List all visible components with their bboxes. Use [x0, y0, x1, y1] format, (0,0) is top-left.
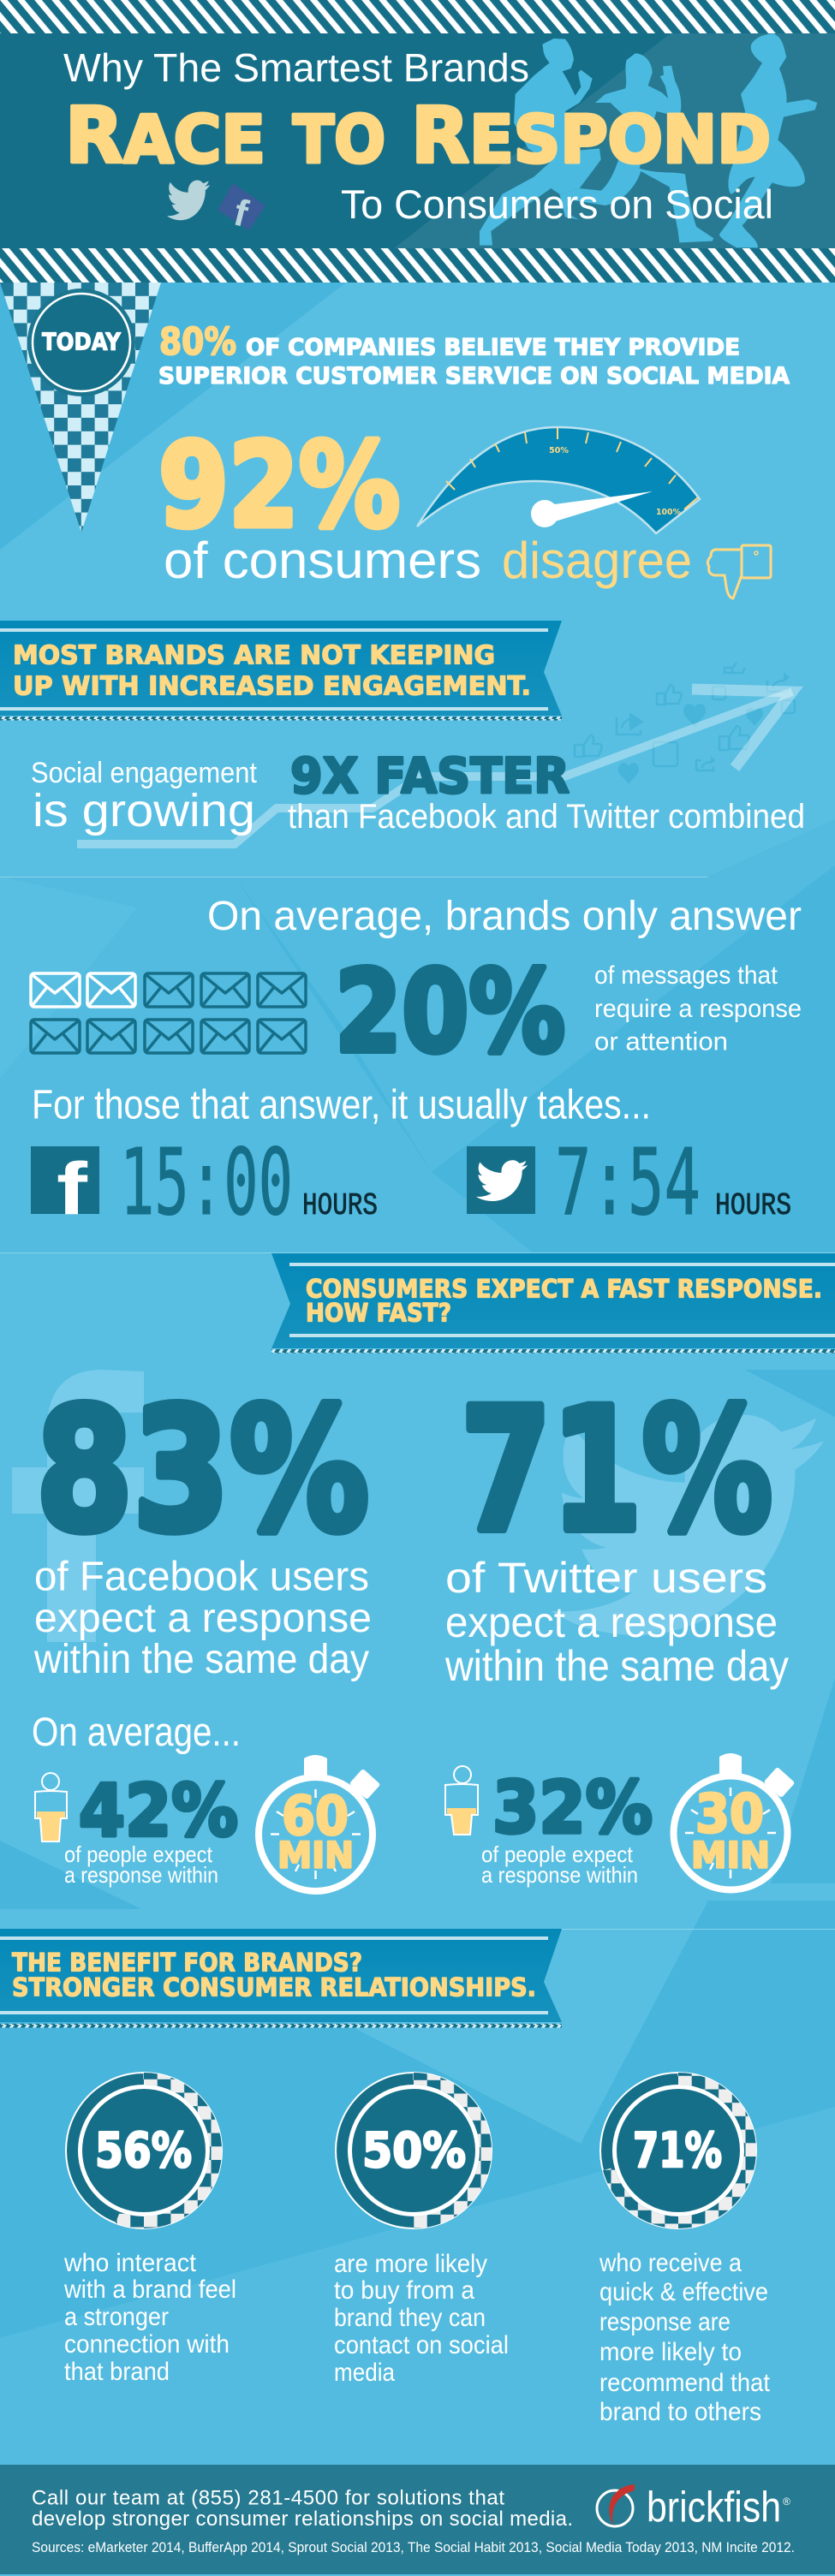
stat: facebook 83%: expect a response: [34, 1596, 372, 1641]
banner: consumers expect: HOW FAST?: [306, 1298, 451, 1327]
text: are more likely: [334, 2250, 509, 2387]
brickfish logo: ®: [783, 2496, 790, 2508]
stat: 42%: [64, 1769, 238, 1888]
text: are more likely: brand they can: [334, 2304, 486, 2332]
icon: person 42%: [35, 1773, 67, 1841]
icon: ten envelopes: [31, 973, 306, 1053]
text: 80% of companies: OF COMPANIES BELIEVE THEY PROVIDE: [246, 334, 740, 361]
header band: [0, 33, 835, 248]
icon: stopwatch 60 min: 60: [282, 1784, 349, 1847]
call to action: develop stronger consumer relationships on social media.: [32, 2508, 573, 2531]
stat: 32%: of people expect: [481, 1841, 634, 1867]
banner: most brands: [0, 621, 562, 721]
text: who receive: response are: [599, 2308, 731, 2336]
donut chart: 56%: 56%: [95, 2123, 192, 2179]
icon: person 32%: [445, 1766, 478, 1835]
banner: the benefit for brands: STRONGER CONSUMER RELATIONSHIPS.: [12, 1972, 536, 2002]
brickfish logo: brickfish: [647, 2484, 781, 2531]
donut chart: 71%: [599, 2072, 757, 2229]
heading: for those that answer: For those that answer, it usually takes...: [32, 1082, 651, 1128]
text: who interact: that brand: [64, 2358, 170, 2386]
header stripes: bottom: [0, 248, 835, 283]
twitter response time: 7:54: [555, 1130, 701, 1236]
text: who interact: who interact: [63, 2249, 197, 2277]
text: of consumers disagree: of consumers: [164, 532, 481, 589]
stat: facebook 83%: 83%: [36, 1371, 369, 1569]
stat: 42%: 42%: [79, 1769, 238, 1853]
facebook response time: 15:00: [120, 1130, 293, 1236]
donut chart: 56%: [65, 2072, 223, 2229]
stat: twitter 71%: [444, 1371, 789, 1690]
text: social engagement is growing: is growing: [33, 785, 255, 836]
text: social engagement is growing: Social engagement: [31, 757, 258, 789]
text: 9X faster: than Facebook and Twitter combined: [288, 798, 805, 836]
stat: 42%: of people expect: [64, 1841, 213, 1867]
icon: facebook tile in header: f: [230, 192, 253, 235]
banner: consumers expect: [271, 1253, 835, 1353]
call to action: Call our team at (855) 281-4500 for solutions that: [32, 2486, 504, 2510]
gauge chart: 100%: [656, 508, 681, 517]
text: who interact: a stronger: [64, 2303, 169, 2331]
donut chart: 50%: [335, 2072, 492, 2229]
gauge chart: 50%: [549, 446, 569, 455]
heading: on average: On average...: [32, 1709, 241, 1754]
icon: ghost facebook f: [12, 1370, 144, 1642]
donut chart: 50%: 50%: [362, 2123, 466, 2179]
icon: stopwatch 30 min: MIN: [691, 1834, 770, 1877]
title: RACE: [65, 91, 265, 181]
text: social engagement is growing: [31, 757, 258, 836]
text: who receive: recommend that: [599, 2369, 771, 2397]
stat: 32%: a response within: [481, 1862, 638, 1888]
stat: 42%: a response within: [64, 1862, 218, 1888]
facebook response time: f: [57, 1148, 87, 1230]
pennant with today badge: [0, 283, 161, 532]
title: [63, 45, 773, 227]
text: are more likely: are more likely: [334, 2250, 487, 2278]
text: of consumers disagree: disagree: [502, 532, 692, 589]
title: RESPOND: [411, 91, 771, 181]
banner: most brands: MOST BRANDS ARE NOT KEEPING: [13, 640, 495, 671]
faint social icons: [575, 663, 795, 784]
heading: on average brands only answer: On average, brands only answer: [207, 894, 802, 939]
twitter response time: [467, 1130, 791, 1236]
text: of messages: [594, 961, 802, 1056]
call to action: [32, 2486, 573, 2531]
stat: 20%: 20%: [335, 947, 565, 1079]
stat: facebook 83%: of Facebook users: [34, 1555, 369, 1599]
stat: twitter 71%: expect a response: [445, 1598, 778, 1646]
stat: twitter 71%: of Twitter users: [445, 1554, 767, 1602]
text: who interact: with a brand feel: [63, 2276, 236, 2304]
donut chart: 71%: 71%: [633, 2123, 722, 2179]
stat: facebook 83%: within the same day: [33, 1637, 369, 1682]
text: are more likely: to buy from a: [334, 2276, 474, 2305]
text: who receive: who receive a: [599, 2249, 742, 2277]
facebook response time: HOURS: [302, 1188, 378, 1223]
twitter response time: HOURS: [715, 1188, 791, 1223]
stat: 32%: [481, 1765, 653, 1888]
arrow: growth: [77, 689, 792, 844]
text: 80% of companies: SUPERIOR CUSTOMER SERVICE ON SOCIAL MEDIA: [158, 363, 790, 390]
icon: facebook tile in header: [218, 183, 265, 235]
title: Why The Smartest Brands: [63, 45, 529, 90]
icon: stopwatch 30 min: [673, 1753, 795, 1890]
text: of messages: require a response: [594, 995, 802, 1023]
text: of messages: or attention: [594, 1027, 728, 1056]
text: are more likely: contact on social: [334, 2331, 509, 2359]
text: of messages: of messages that: [594, 961, 778, 990]
text: who receive: [599, 2249, 771, 2426]
text: who interact: connection with: [64, 2330, 230, 2359]
stat: facebook 83%: [33, 1371, 372, 1682]
stat: 32%: 32%: [492, 1765, 653, 1849]
stat: 92%: 92%: [158, 419, 400, 554]
text: who receive: brand to others: [599, 2398, 761, 2426]
banner: most brands: UP WITH INCREASED ENGAGEMENT.: [13, 671, 531, 702]
header stripes: top: [0, 0, 835, 33]
icon: stopwatch 30 min: 30: [695, 1782, 764, 1845]
brickfish logo: [597, 2484, 790, 2531]
icon: stopwatch 60 min: MIN: [277, 1834, 354, 1877]
title: To Consumers on Social: [341, 181, 773, 227]
footer panel: [0, 2465, 835, 2574]
gauge chart: [417, 427, 700, 533]
text: who receive: more likely to: [599, 2338, 742, 2366]
icon: stopwatch 60 min: [259, 1755, 380, 1891]
text: of consumers disagree: [164, 532, 692, 589]
text: who interact: [63, 2249, 236, 2386]
icon: thumbs down: [707, 545, 771, 598]
text: who receive: quick & effective: [599, 2278, 768, 2306]
text: 9X faster: 9X FASTER: [290, 748, 570, 805]
pennant with today badge: TODAY: [42, 327, 122, 356]
icon: ghost twitter bird: [551, 1415, 824, 1635]
banner: the benefit for brands: THE BENEFIT FOR BRANDS?: [12, 1948, 362, 1978]
text: 80% of companies: 80%: [159, 320, 236, 364]
text: 80% of companies: [158, 320, 790, 390]
title: TO: [293, 103, 385, 178]
icon: three runners: [480, 33, 817, 247]
text: are more likely: media: [334, 2359, 395, 2387]
icon: twitter bird in header: [167, 180, 210, 220]
text: 9X faster: [288, 748, 805, 836]
stat: twitter 71%: within the same day: [444, 1642, 789, 1690]
banner: the benefit for brands: [0, 1929, 835, 2027]
